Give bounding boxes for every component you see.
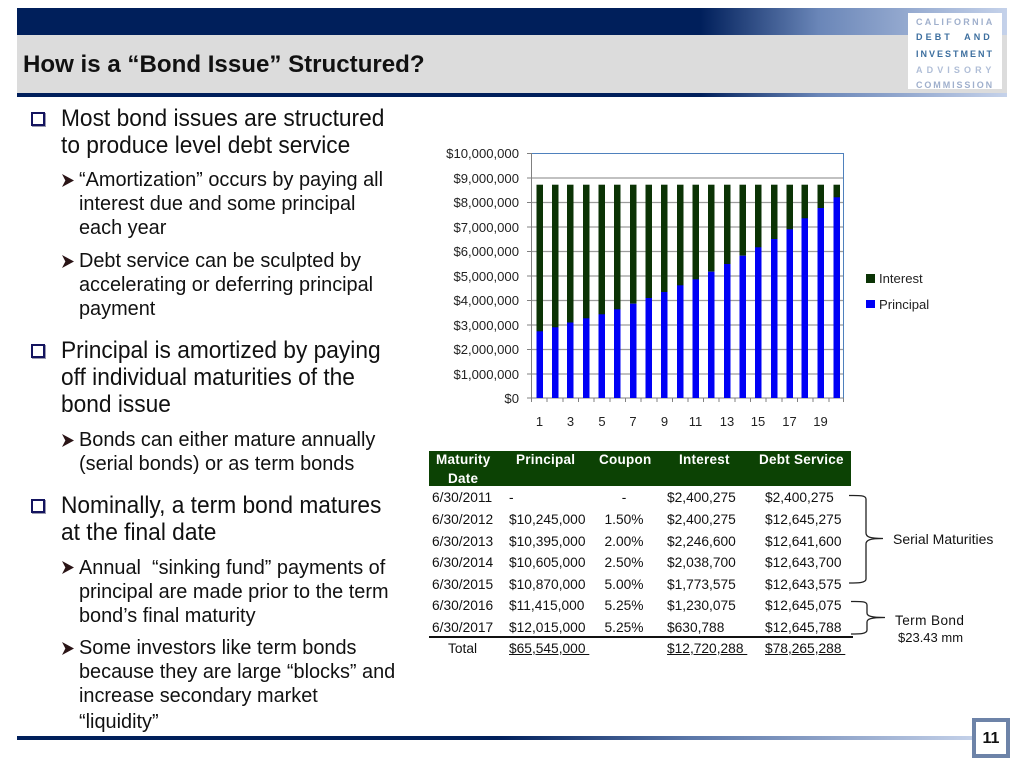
interest series bars <box>536 185 840 332</box>
x axis labels: 9 <box>661 414 668 429</box>
table rows: $12,720,288 <box>667 641 743 656</box>
logo: California Debt and Investment Advisory Commission: COMMISSION <box>916 80 994 90</box>
table rows: $2,246,600 <box>667 534 736 549</box>
y axis labels: $9,000,000 <box>453 171 519 186</box>
table rows: $12,641,600 <box>765 534 841 549</box>
sub-bullet investors: Some investors like term bonds <box>79 637 356 659</box>
bullet 3 marker <box>31 499 45 513</box>
header rule <box>17 93 1007 97</box>
sub-bullet sculpted: accelerating or deferring principal <box>79 274 373 296</box>
table rows: 2.00% <box>604 534 644 549</box>
table rows: $11,415,000 <box>509 598 584 613</box>
label: term bond: Term Bond <box>895 613 964 628</box>
bullet 3 text: Nominally, a term bond matures <box>61 492 381 519</box>
table rows: 6/30/2015 <box>432 577 493 592</box>
table rows: $2,400,275 <box>667 512 736 527</box>
label: term bond: $23.43 mm <box>898 630 963 645</box>
table rows: 6/30/2014 <box>432 555 493 570</box>
y axis labels: $8,000,000 <box>453 195 519 210</box>
page number box <box>972 718 1010 758</box>
principal series bars <box>536 197 840 398</box>
table rows: $10,245,000 <box>509 512 585 527</box>
logo: California Debt and Investment Advisory Commission: ADVISORY <box>916 65 995 75</box>
table rows: 5.25% <box>604 598 644 613</box>
table rows: 5.00% <box>604 577 644 592</box>
sub-bullet amortization <box>79 169 383 239</box>
logo: California Debt and Investment Advisory Commission: INVESTMENT <box>916 49 994 59</box>
x axis labels: 19 <box>813 414 828 429</box>
y axis labels: $0 <box>504 391 519 406</box>
table rows: $10,605,000 <box>509 555 585 570</box>
table rows: 6/30/2012 <box>432 512 493 527</box>
bullet 3 text: at the final date <box>61 519 216 546</box>
sub-bullet investors: “liquidity” <box>79 711 159 733</box>
table header labels <box>436 452 844 486</box>
table rows: Total <box>448 641 477 656</box>
title: How is a “Bond Issue” Structured? <box>23 51 425 78</box>
table header labels: Interest <box>679 452 730 467</box>
x axis labels: 15 <box>751 414 765 429</box>
bullet text column <box>31 105 395 733</box>
bracket: serial maturities <box>849 494 883 584</box>
legend: Interest <box>879 271 923 286</box>
logo: California Debt and Investment Advisory Commission: DEBT AND <box>916 32 993 42</box>
y axis labels <box>446 146 519 406</box>
sub-bullet amortization: “Amortization” occurs by paying all <box>79 169 383 191</box>
sub-bullet sinking fund <box>79 557 389 627</box>
sub-bullet sculpted: Debt service can be sculpted by <box>79 250 361 272</box>
table rows: $2,038,700 <box>667 555 736 570</box>
table rows: $12,645,275 <box>765 512 841 527</box>
table rows: 6/30/2013 <box>432 534 493 549</box>
x axis labels: 11 <box>689 414 702 429</box>
bullet 2 text: off individual maturities of the <box>61 364 355 391</box>
table rows: - <box>509 490 514 505</box>
header band <box>17 8 1007 97</box>
legend: Principal <box>879 297 929 312</box>
sub-bullet sinking fund: Annual “sinking fund” payments of <box>79 557 385 579</box>
y axis labels: $6,000,000 <box>453 244 519 259</box>
table rows: 1.50% <box>604 512 644 527</box>
table header labels: Principal <box>516 452 575 467</box>
table header labels: Maturity <box>436 452 491 467</box>
sub-bullet amortization: interest due and some principal <box>79 193 355 215</box>
table rows: $12,643,700 <box>765 555 841 570</box>
table rows: $1,773,575 <box>667 577 736 592</box>
title background <box>17 35 1007 93</box>
y axis labels: $5,000,000 <box>453 269 519 284</box>
sub-bullet marker <box>62 642 74 655</box>
header gradient bar <box>17 8 1007 35</box>
bracket: term bond <box>851 600 885 635</box>
y axis labels: $7,000,000 <box>453 220 519 235</box>
x axis labels: 13 <box>720 414 734 429</box>
footer rule <box>17 736 977 740</box>
bullet 2 marker <box>31 344 45 358</box>
table rows: $630,788 <box>667 620 724 635</box>
y axis labels: $3,000,000 <box>453 318 519 333</box>
table rows: $12,015,000 <box>509 620 585 635</box>
maturity table <box>429 451 853 656</box>
table header background <box>429 451 851 486</box>
sub-bullet investors: because they are large “blocks” and <box>79 661 395 683</box>
label: term bond <box>895 613 964 645</box>
table rows: $78,265,288 <box>765 641 841 656</box>
sub-bullet sculpted <box>79 250 373 320</box>
sub-bullet annual maturity: Bonds can either mature annually <box>79 429 375 451</box>
legend <box>866 271 929 312</box>
page number box: 11 <box>983 730 999 747</box>
bullet 3 text <box>61 492 381 546</box>
stacked bar chart <box>446 146 929 429</box>
table rows: $12,645,075 <box>765 598 841 613</box>
y axis labels: $10,000,000 <box>446 146 519 161</box>
x axis labels: 1 <box>536 414 543 429</box>
sub-bullet annual maturity: (serial bonds) or as term bonds <box>79 453 354 475</box>
sub-bullet marker <box>62 174 74 187</box>
sub-bullet investors: increase secondary market <box>79 685 318 707</box>
table rows: 6/30/2011 <box>432 490 492 505</box>
table rows: - <box>622 490 626 505</box>
plot area border <box>532 154 844 398</box>
table rows: $65,545,000 <box>509 641 585 656</box>
sub-bullet investors <box>79 637 395 733</box>
y axis labels: $1,000,000 <box>453 367 519 382</box>
logo: California Debt and Investment Advisory Commission <box>908 13 1002 89</box>
sub-bullet sinking fund: bond’s final maturity <box>79 605 256 627</box>
sub-bullet marker <box>62 255 74 268</box>
table header labels: Debt Service <box>759 452 844 467</box>
x axis labels: 3 <box>567 414 574 429</box>
bullet 2 text <box>61 337 381 418</box>
bullet 2 text: Principal is amortized by paying <box>61 337 381 364</box>
x axis labels <box>536 414 828 429</box>
sub-bullet sculpted: payment <box>79 298 155 320</box>
table rows: $1,230,075 <box>667 598 736 613</box>
table rows: 2.50% <box>604 555 644 570</box>
table rows: $2,400,275 <box>667 490 736 505</box>
table rows: $2,400,275 <box>765 490 834 505</box>
table rows: 6/30/2017 <box>432 620 493 635</box>
x axis labels: 7 <box>629 414 637 429</box>
table rows: $12,645,788 <box>765 620 841 635</box>
table rows: $10,870,000 <box>509 577 585 592</box>
table rows: 6/30/2016 <box>432 598 493 613</box>
table header labels: Coupon <box>599 452 651 467</box>
table rows <box>429 490 853 656</box>
bullet 1 text: Most bond issues are structured <box>61 105 384 132</box>
x axis labels: 5 <box>598 414 606 429</box>
table rows: $10,395,000 <box>509 534 585 549</box>
sub-bullet marker <box>62 561 74 574</box>
sub-bullet marker <box>62 434 74 447</box>
bullet 1 marker <box>31 112 45 126</box>
label: serial maturities: Serial Maturities <box>893 531 993 547</box>
sub-bullet sinking fund: principal are made prior to the term <box>79 581 389 603</box>
table header labels: Date <box>448 471 478 486</box>
table rows: $12,643,575 <box>765 577 841 592</box>
bullet 2 text: bond issue <box>61 391 171 418</box>
logo: California Debt and Investment Advisory Commission: CALIFORNIA <box>916 17 994 27</box>
y axis labels: $2,000,000 <box>453 342 519 357</box>
sub-bullet amortization: each year <box>79 217 166 239</box>
sub-bullet annual maturity <box>79 429 376 475</box>
table rows: 5.25% <box>604 620 644 635</box>
y axis labels: $4,000,000 <box>453 293 519 308</box>
x axis labels: 17 <box>782 414 797 429</box>
bullet 1 text line 2: to produce level debt service <box>61 132 350 159</box>
